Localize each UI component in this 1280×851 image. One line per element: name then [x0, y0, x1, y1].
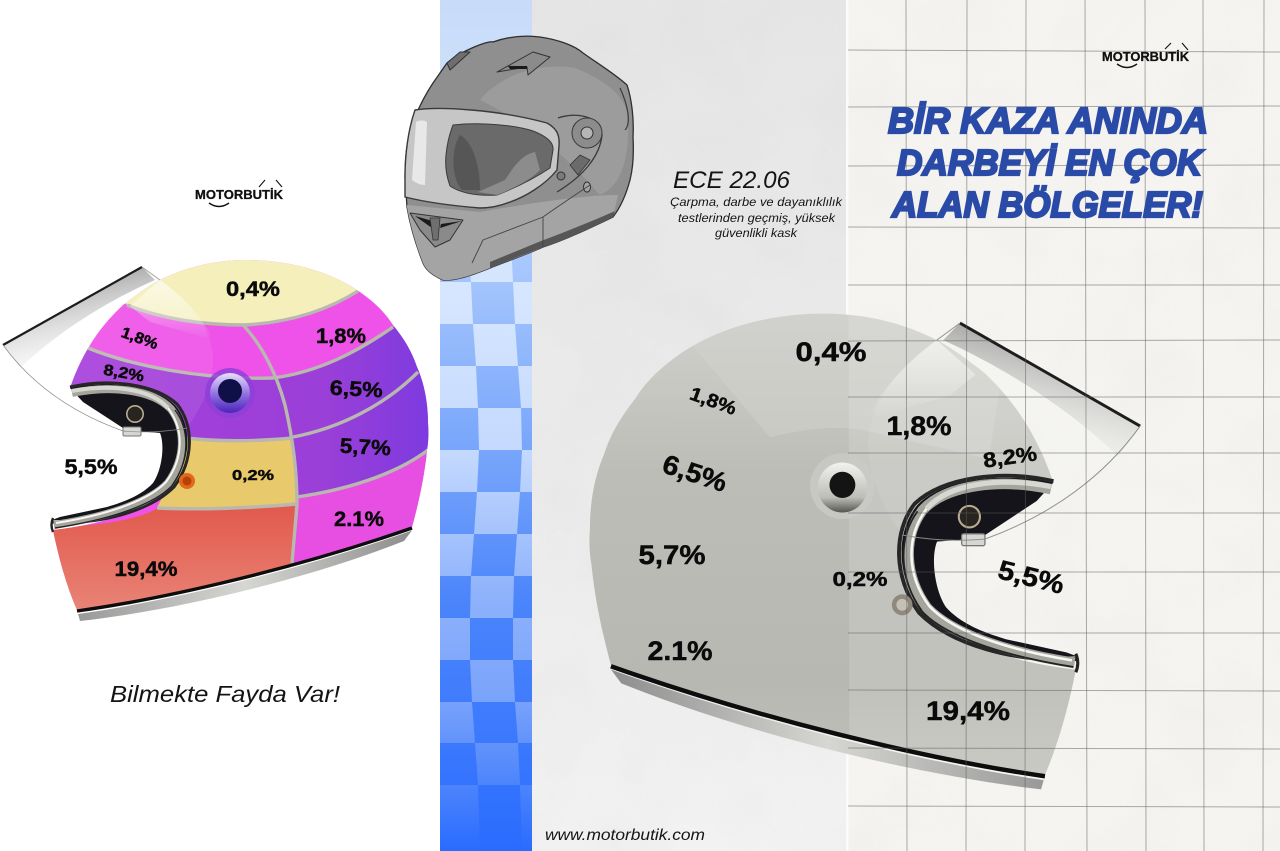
text block: ECE 22.06 standard: Çarpma, darbe ve dayanıklılık	[670, 197, 843, 209]
percent labels: right helmet: 1,8%	[687, 384, 739, 420]
percent labels: right helmet: 0,2%	[832, 569, 888, 591]
percent labels: right helmet: 2.1%	[648, 636, 712, 666]
website url: www.motorbutik.com	[545, 827, 705, 844]
right helmet: grey impact diagram	[590, 314, 1141, 790]
panel: crumpled paper middle	[532, 0, 848, 851]
percent labels: left helmet: 0,4%	[226, 278, 280, 301]
percent labels: left helmet: 1,8%	[119, 324, 161, 353]
percent labels: right helmet: 0,4%	[796, 337, 866, 367]
logo: right Motorbutik: MOTORBUTİK	[1102, 49, 1190, 64]
percent labels: left helmet: 0,2%	[232, 467, 274, 484]
logo: right Motorbutik	[1102, 43, 1190, 68]
percent labels: right helmet: 6,5%	[659, 449, 731, 498]
percent labels: left helmet	[64, 278, 392, 581]
left helmet: coloured impact diagram	[2, 260, 428, 621]
percent labels: left helmet: 8,2%	[102, 362, 146, 386]
title: ALAN BÖLGELER!	[891, 184, 1203, 225]
panel: grid paper right	[846, 0, 1280, 851]
percent labels: right helmet	[638, 337, 1067, 726]
text block: ECE 22.06 standard: testlerinden geçmiş, yüksek	[678, 213, 836, 225]
percent labels: right helmet: 1,8%	[886, 411, 952, 441]
percent labels: left helmet: 19,4%	[114, 558, 178, 581]
title	[888, 100, 1208, 225]
percent labels: right helmet: 5,7%	[638, 540, 706, 570]
percent labels: left helmet: 6,5%	[329, 377, 384, 402]
percent labels: right helmet: 19,4%	[926, 696, 1010, 726]
percent labels: right helmet: 5,5%	[995, 555, 1067, 600]
logo: left Motorbutik	[195, 180, 284, 206]
percent labels: left helmet: 2.1%	[334, 508, 384, 531]
title: DARBEYİ EN ÇOK	[897, 142, 1205, 183]
text block: ECE 22.06 standard: güvenlikli kask	[715, 228, 798, 240]
caption: Bilmekte Fayda Var: Bilmekte Fayda Var!	[110, 681, 341, 707]
top helmet illustration: ECE full-face helmet	[405, 36, 633, 280]
panel: blue checker strip	[440, 0, 532, 851]
text block: ECE 22.06 standard: ECE 22.06	[673, 167, 791, 194]
panel: white left background	[0, 0, 440, 851]
percent labels: right helmet: 8,2%	[982, 442, 1039, 473]
grid lines over the right panel	[848, 0, 1280, 851]
percent labels: left helmet: 5,7%	[339, 435, 392, 460]
text block: ECE 22.06 standard	[670, 167, 843, 240]
percent labels: left helmet: 5,5%	[64, 456, 118, 479]
percent labels: left helmet: 1,8%	[316, 325, 366, 348]
logo: left Motorbutik: MOTORBUTİK	[195, 187, 284, 202]
title: BİR KAZA ANINDA	[888, 100, 1208, 141]
